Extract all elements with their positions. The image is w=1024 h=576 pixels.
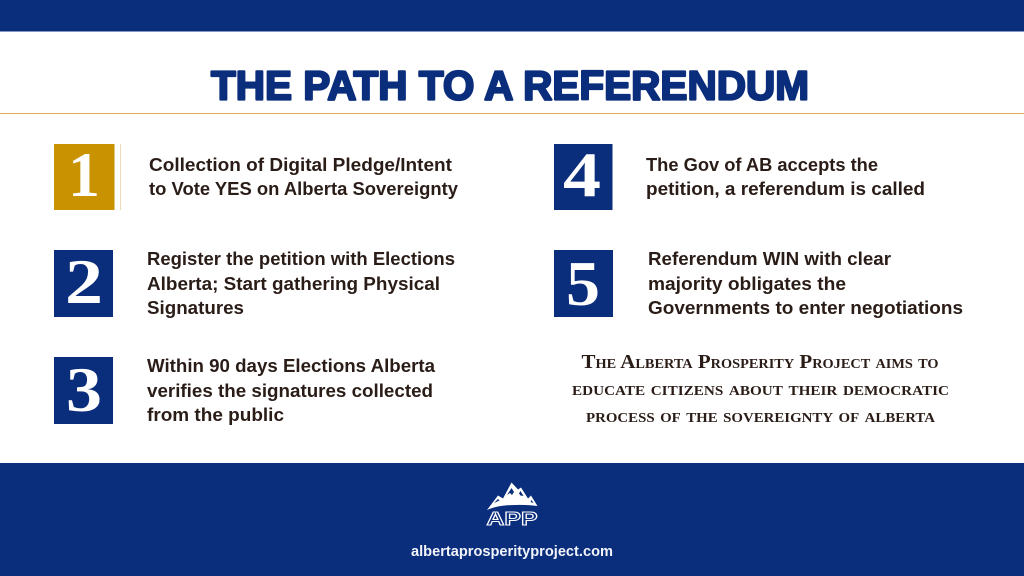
step 3 text: verifies the signatures collected — [147, 381, 433, 401]
step 5 — [554, 248, 963, 319]
step 4 text: The Gov of AB accepts the — [646, 155, 878, 175]
icon: APP mountain logo — [486, 482, 538, 529]
step 2 — [54, 246, 455, 318]
step 2 text: Alberta; Start gathering Physical — [147, 274, 440, 294]
number badge 2: 2 — [65, 246, 103, 317]
step 1 text: to Vote YES on Alberta Sovereignty — [149, 179, 458, 199]
number badge 3: 3 — [66, 354, 102, 425]
step 2 text: Signatures — [147, 298, 244, 318]
icon: APP mountain logo: APP — [486, 509, 538, 529]
website: albertaprosperityproject.com — [411, 544, 613, 560]
mission statement: educate citizens about their democratic — [572, 378, 949, 400]
step 5 text: majority obligates the — [648, 274, 846, 294]
step 3 text — [147, 356, 436, 425]
step 1 text: Collection of Digital Pledge/Intent — [149, 155, 452, 175]
step 2 text: Register the petition with Elections — [147, 249, 455, 269]
mission statement — [572, 351, 949, 427]
step 3 text: Within 90 days Elections Alberta — [147, 356, 436, 376]
number badge 1: 1 — [68, 139, 100, 210]
step 5 text: Governments to enter negotiations — [648, 298, 963, 318]
step 5 text — [648, 249, 963, 318]
step 3 text: from the public — [147, 405, 284, 425]
step 3 — [54, 354, 436, 425]
step 1 text — [149, 155, 458, 199]
number badge 5: 5 — [566, 248, 600, 319]
step 1 — [54, 139, 458, 210]
step 4 — [554, 139, 925, 210]
step 4 text: petition, a referendum is called — [646, 179, 925, 199]
title: THE PATH TO A REFERENDUM — [211, 62, 809, 108]
number badge 5 — [554, 248, 613, 319]
number badge 4 — [554, 139, 612, 210]
number badge 2 — [54, 246, 113, 317]
number badge 3 — [54, 354, 113, 425]
number badge 1 — [54, 139, 114, 210]
step 4 text — [646, 155, 925, 199]
mission statement: process of the sovereignty of alberta — [586, 405, 936, 427]
footer band — [0, 463, 1024, 576]
step 5 text: Referendum WIN with clear — [648, 249, 891, 269]
mission statement: The Alberta Prosperity Project aims to — [582, 351, 939, 373]
number badge 4: 4 — [563, 139, 601, 210]
top bar — [0, 0, 1024, 32]
step 2 text — [147, 249, 455, 318]
